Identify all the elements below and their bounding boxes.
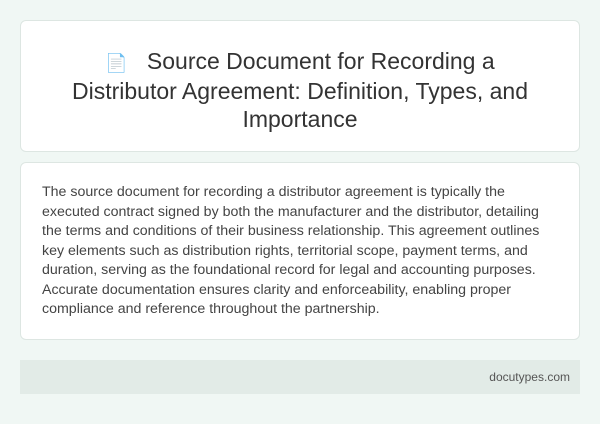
description text: The source document for recording a distributor agreement is typically the <box>42 184 505 200</box>
title card <box>20 20 580 152</box>
footer <box>20 360 580 394</box>
description card <box>20 162 580 340</box>
description text <box>42 184 539 317</box>
description text: key elements such as distribution rights, territorial scope, payment terms, and <box>42 242 528 258</box>
description text: Accurate documentation ensures clarity and enforceability, enabling proper <box>42 282 511 298</box>
description text: the terms and conditions of their business relationship. This agreement outlines <box>42 223 539 239</box>
title: 📄 Source Document for Recording a Distributor Agreement: Definition, Types, and Importance <box>72 48 528 132</box>
description text: executed contract signed by both the manufacturer and the distributor, detailing <box>42 204 539 220</box>
description text: duration, serving as the foundational record for legal and accounting purposes. <box>42 262 536 278</box>
description text: compliance and reference throughout the partnership. <box>42 301 380 317</box>
footer site name: docutypes.com <box>489 370 570 384</box>
